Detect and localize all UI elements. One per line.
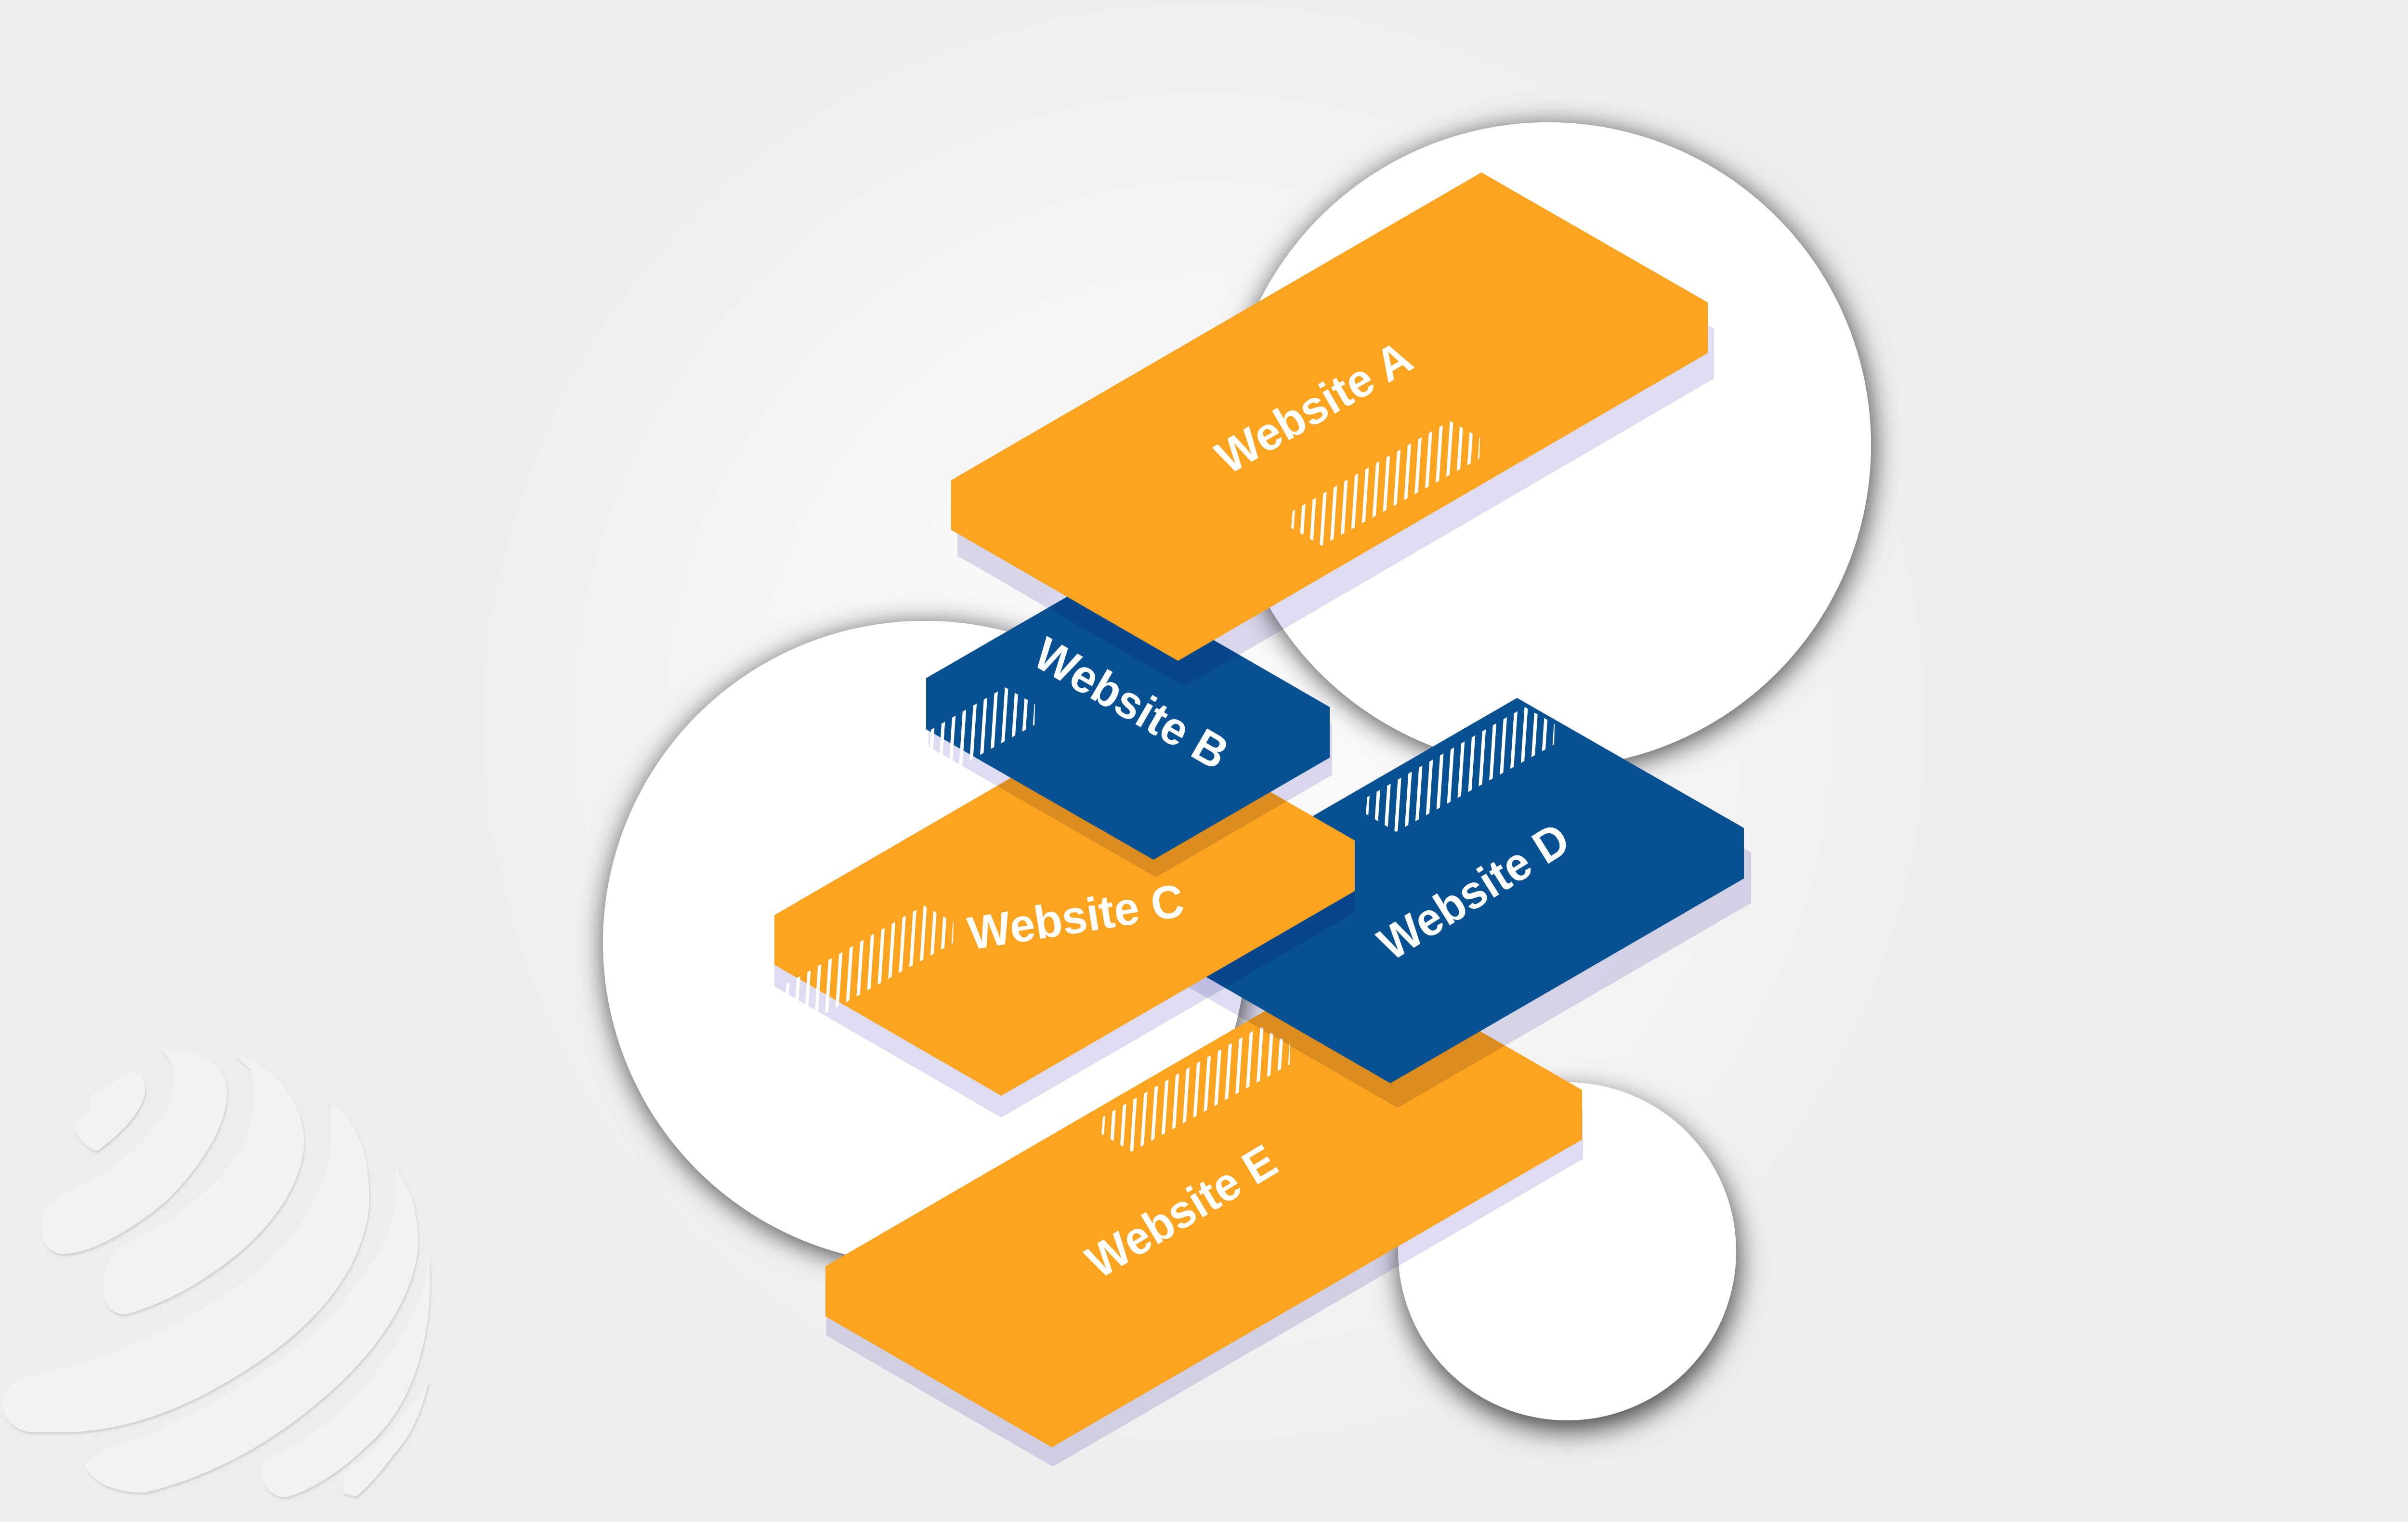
label: Website C: [964, 874, 1188, 960]
plate shadow: [929, 593, 1332, 877]
panel: Website C plate: [774, 778, 1355, 1117]
plate top: [1164, 698, 1744, 1083]
panel: Website B plate: [926, 597, 1332, 877]
small white circle, bottom right: [1398, 1082, 1736, 1420]
large white circle, top right: [1226, 122, 1871, 768]
hatch pattern: [785, 905, 954, 1014]
label: Website A: [1207, 330, 1421, 484]
label: Website E: [1077, 1134, 1286, 1288]
plate shadow: [1171, 722, 1751, 1108]
plate shadow: [774, 732, 1355, 1117]
hatch pattern: [1365, 701, 1557, 845]
plate top: [825, 959, 1582, 1447]
label: Website B: [1026, 627, 1237, 780]
hatch pattern: [1100, 1021, 1293, 1165]
label: Website D: [1369, 813, 1579, 971]
plate top: [926, 576, 1330, 860]
hatch pattern: [1290, 415, 1482, 559]
plate shadow: [826, 978, 1583, 1467]
plate shadow: [957, 198, 1714, 687]
plate top: [951, 172, 1708, 661]
panel: Website D plate: [1164, 698, 1751, 1108]
large white circle, left: [603, 621, 1246, 1264]
hatch pattern: [929, 687, 1035, 765]
icon: faint globe watermark: [3, 1049, 430, 1497]
plate top: [774, 710, 1355, 1096]
panel: Website A plate: [951, 172, 1714, 687]
panel: Website E plate: [825, 959, 1583, 1467]
